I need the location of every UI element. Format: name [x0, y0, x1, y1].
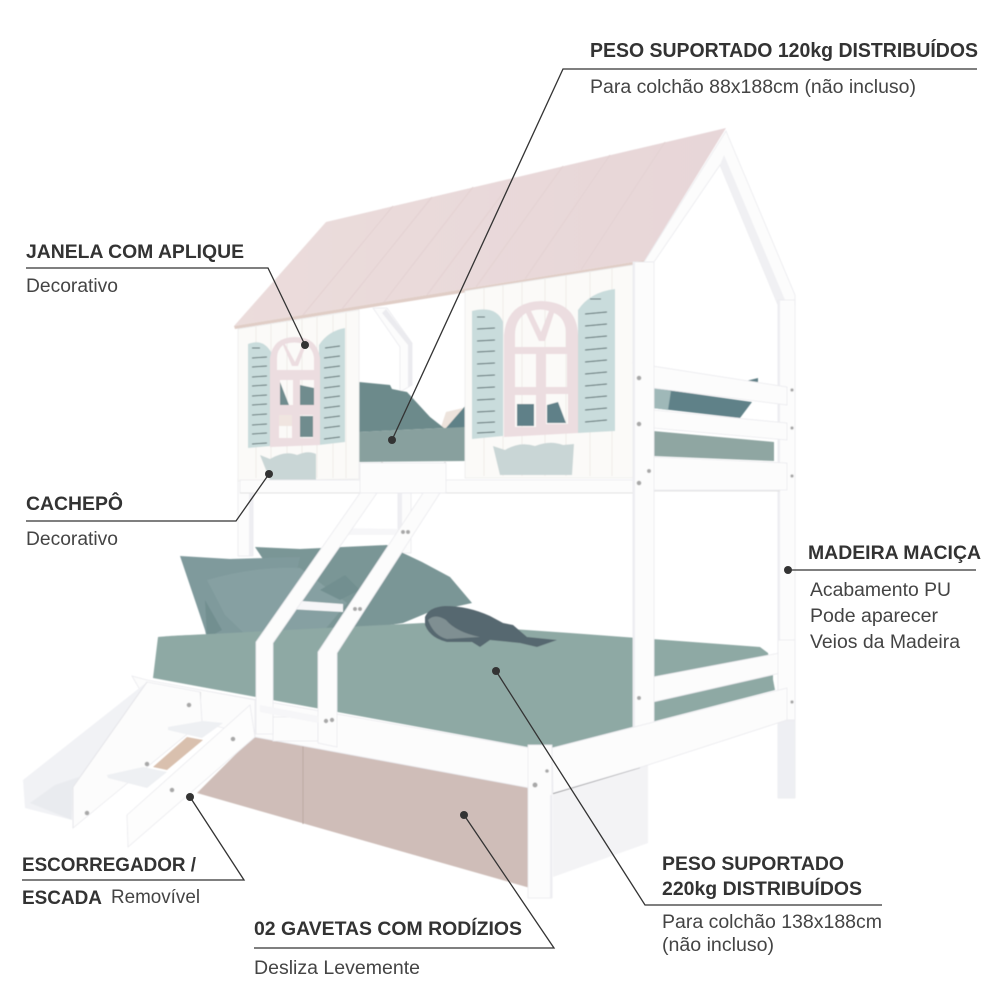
- leader line: [496, 671, 882, 905]
- small back gable frame: [373, 308, 412, 392]
- heading: PESO SUPORTADO: [662, 854, 844, 875]
- slide surface: [23, 682, 200, 820]
- note lines: (não incluso): [662, 935, 774, 956]
- arched window frame right: [504, 301, 578, 437]
- lower bunk pillows: [180, 545, 472, 641]
- left house panel: [238, 310, 359, 481]
- second heading line: ESCADA: [22, 888, 102, 909]
- slats left window: [252, 346, 340, 444]
- note lines: [662, 912, 882, 956]
- heading: CACHEPÔ: [26, 493, 123, 515]
- slide side panel: [73, 682, 202, 828]
- slats right window: [477, 299, 607, 433]
- note: Decorativo: [26, 529, 118, 550]
- note lines: Veios da Madeira: [810, 632, 960, 653]
- leader line: [254, 815, 554, 948]
- heading second line: 220kg DISTRIBUÍDOS: [662, 878, 862, 900]
- anchor dot: [784, 566, 792, 574]
- stair steps: [168, 721, 223, 738]
- stair stringer: [127, 705, 255, 847]
- right house panel: [465, 265, 633, 478]
- note: Removível: [111, 887, 200, 908]
- back panel: [132, 676, 255, 737]
- headboard seen through lower pane: [279, 415, 292, 426]
- drawers: [197, 733, 530, 888]
- callout: weight upper bunk: [388, 39, 978, 444]
- slide and removable stairs: [23, 676, 255, 847]
- leader line: [788, 569, 976, 571]
- whale plush toy: [425, 606, 557, 647]
- note: Para colchão 88x188cm (não incluso): [590, 77, 916, 98]
- back posts of the bed: [238, 480, 411, 556]
- callout: weight lower bunk: [492, 667, 882, 956]
- anchor dot: [388, 436, 396, 444]
- anchor dot: [492, 667, 500, 675]
- left cachepo: [260, 452, 316, 480]
- right cachepo: [493, 443, 574, 475]
- left shutter right window: [472, 309, 503, 439]
- view through left window panes: [280, 382, 314, 437]
- note lines: Para colchão 138x188cm: [662, 912, 882, 933]
- lower mattress: [153, 623, 775, 748]
- left shutter left window: [248, 342, 271, 448]
- drawer glimpse between steps: [153, 737, 203, 770]
- arched window frame left: [270, 337, 320, 447]
- upper bunk middle mattress and pillows: [359, 382, 466, 462]
- right shutter right window: [578, 289, 615, 433]
- leader line: [22, 797, 244, 880]
- heading: ESCORREGADOR /: [22, 855, 197, 876]
- leader line: [26, 474, 269, 521]
- heading: PESO SUPORTADO 120kg DISTRIBUÍDOS: [590, 39, 978, 62]
- pillows seen through right window: [517, 402, 566, 426]
- callout: drawers: [254, 811, 554, 979]
- anchor dot: [265, 470, 273, 478]
- heading: 02 GAVETAS COM RODÍZIOS: [254, 918, 522, 940]
- anchor dot: [186, 793, 194, 801]
- roof: [234, 128, 726, 329]
- leader line: [392, 69, 977, 440]
- callout: window: [26, 242, 309, 349]
- callout: solid wood: [784, 543, 981, 653]
- note lines: Pode aparecer: [810, 606, 939, 627]
- lower right posts and rail: [633, 262, 795, 738]
- bed base rail: [201, 688, 787, 898]
- left window with shutters: [248, 328, 345, 448]
- leader line: [26, 268, 305, 345]
- anchor dot: [301, 341, 309, 349]
- note: Desliza Levemente: [254, 958, 420, 979]
- note lines: Acabamento PU: [810, 580, 951, 601]
- ladder: [256, 463, 446, 747]
- right window with shutters: [472, 289, 615, 439]
- heading: JANELA COM APLIQUE: [26, 242, 244, 263]
- drawer side: [553, 765, 648, 877]
- bunk bed illustration: [23, 128, 795, 898]
- ladder hangers: [382, 462, 445, 490]
- note lines: [810, 580, 960, 653]
- heading: MADEIRA MACIÇA: [808, 543, 981, 564]
- right shutter left window: [319, 328, 345, 445]
- upper right rails and mattress: [240, 363, 787, 493]
- callout: slide and stairs: [22, 793, 244, 909]
- right gable frame: [644, 131, 795, 798]
- callout: cachepo: [26, 470, 273, 550]
- note: Decorativo: [26, 276, 118, 297]
- anchor dot: [460, 811, 468, 819]
